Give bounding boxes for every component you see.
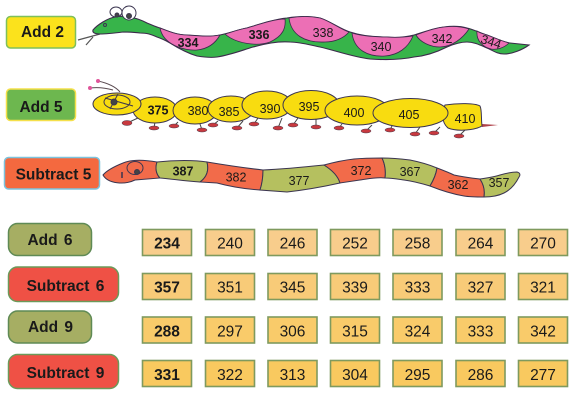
- worm eye: [122, 162, 143, 178]
- worm: subtract 5: 387: [173, 164, 193, 178]
- label: Add 6: Add 6: [27, 232, 73, 249]
- caterpillar: add 5: [88, 79, 498, 138]
- caterpillar: add 5: 410: [455, 112, 475, 126]
- label: Add 2: [6, 16, 76, 48]
- snake: add 2: 338: [313, 26, 333, 40]
- label: Subtract 6: [8, 267, 118, 302]
- number row: add 6: 270: [530, 236, 556, 252]
- number row: add 6: 264: [468, 236, 494, 252]
- snake: add 2: 342: [432, 32, 452, 46]
- label: Subtract 9: [8, 354, 118, 388]
- snake: add 2: [78, 6, 529, 60]
- snake: add 2: 334: [178, 36, 198, 50]
- number row: subtract 9: 322: [217, 367, 243, 384]
- number row: add 6: 258: [405, 236, 430, 252]
- number row: subtract 9: 331: [154, 367, 180, 384]
- snake: add 2: 340: [371, 40, 391, 54]
- number row: subtract 6: 321: [530, 280, 556, 296]
- snake eyes: [104, 6, 136, 26]
- number row: subtract 6: [142, 274, 568, 300]
- worm: subtract 5: 382: [226, 170, 246, 184]
- number row: subtract 9: 295: [405, 367, 430, 384]
- number row: add 6: 252: [342, 236, 368, 252]
- label: Add 9: Add 9: [28, 319, 73, 336]
- number row: add 9: 306: [280, 324, 305, 340]
- caterpillar legs: [127, 118, 465, 136]
- caterpillar: add 5: 385: [219, 105, 239, 119]
- worm: subtract 5: 357: [489, 176, 509, 190]
- snake pink patches: [160, 16, 509, 56]
- caterpillar eye: [104, 94, 133, 109]
- label: Add 5: [6, 89, 76, 120]
- label: Subtract 5: [4, 158, 100, 189]
- number row: add 9: [142, 317, 568, 343]
- caterpillar: add 5: 400: [344, 106, 364, 120]
- number row: subtract 6: 339: [342, 280, 368, 296]
- number row: add 6: 234: [154, 236, 180, 252]
- caterpillar: add 5: 405: [399, 108, 419, 122]
- number row: subtract 6: 327: [468, 280, 493, 296]
- number row: add 6: 240: [217, 236, 243, 252]
- number row: subtract 6: 357: [154, 280, 180, 296]
- number row: subtract 6: 333: [405, 280, 430, 296]
- worm: subtract 5: 372: [351, 164, 371, 178]
- snake: add 2: 336: [249, 28, 269, 42]
- worm: subtract 5: 377: [289, 174, 309, 188]
- label: Subtract 9: Subtract 9: [27, 365, 105, 382]
- caterpillar: add 5: 390: [260, 102, 280, 116]
- number row: subtract 9: 286: [468, 367, 493, 384]
- label: Add 5: Add 5: [19, 99, 63, 116]
- worm: subtract 5: 367: [400, 165, 420, 179]
- number row: add 9: 333: [468, 324, 493, 340]
- caterpillar: add 5: 375: [148, 104, 168, 118]
- number row: subtract 6: 351: [217, 280, 243, 296]
- number row: add 9: 315: [342, 324, 368, 340]
- caterpillar: add 5: 380: [188, 104, 208, 118]
- number row: add 6: [142, 230, 568, 256]
- number row: subtract 9: [142, 360, 568, 386]
- number row: subtract 6: 345: [280, 280, 305, 296]
- number row: add 9: 288: [154, 324, 180, 340]
- label: Subtract 6: Subtract 6: [27, 278, 105, 295]
- label: Add 9: [8, 311, 92, 343]
- number row: subtract 9: 313: [280, 367, 305, 384]
- snake: add 2: 344: [479, 32, 503, 52]
- number row: add 9: 297: [217, 324, 243, 340]
- label: Add 6: [8, 224, 92, 256]
- number row: add 6: 246: [280, 236, 305, 252]
- label: Subtract 5: Subtract 5: [16, 166, 92, 184]
- worm: subtract 5: [103, 158, 520, 197]
- caterpillar: add 5: 395: [299, 100, 319, 114]
- worm: subtract 5: 362: [448, 178, 468, 192]
- number row: subtract 9: 304: [342, 367, 368, 384]
- label: Add 2: Add 2: [21, 24, 64, 41]
- number row: subtract 9: 277: [530, 367, 556, 384]
- number row: add 9: 342: [530, 324, 556, 340]
- number row: add 9: 324: [405, 324, 431, 340]
